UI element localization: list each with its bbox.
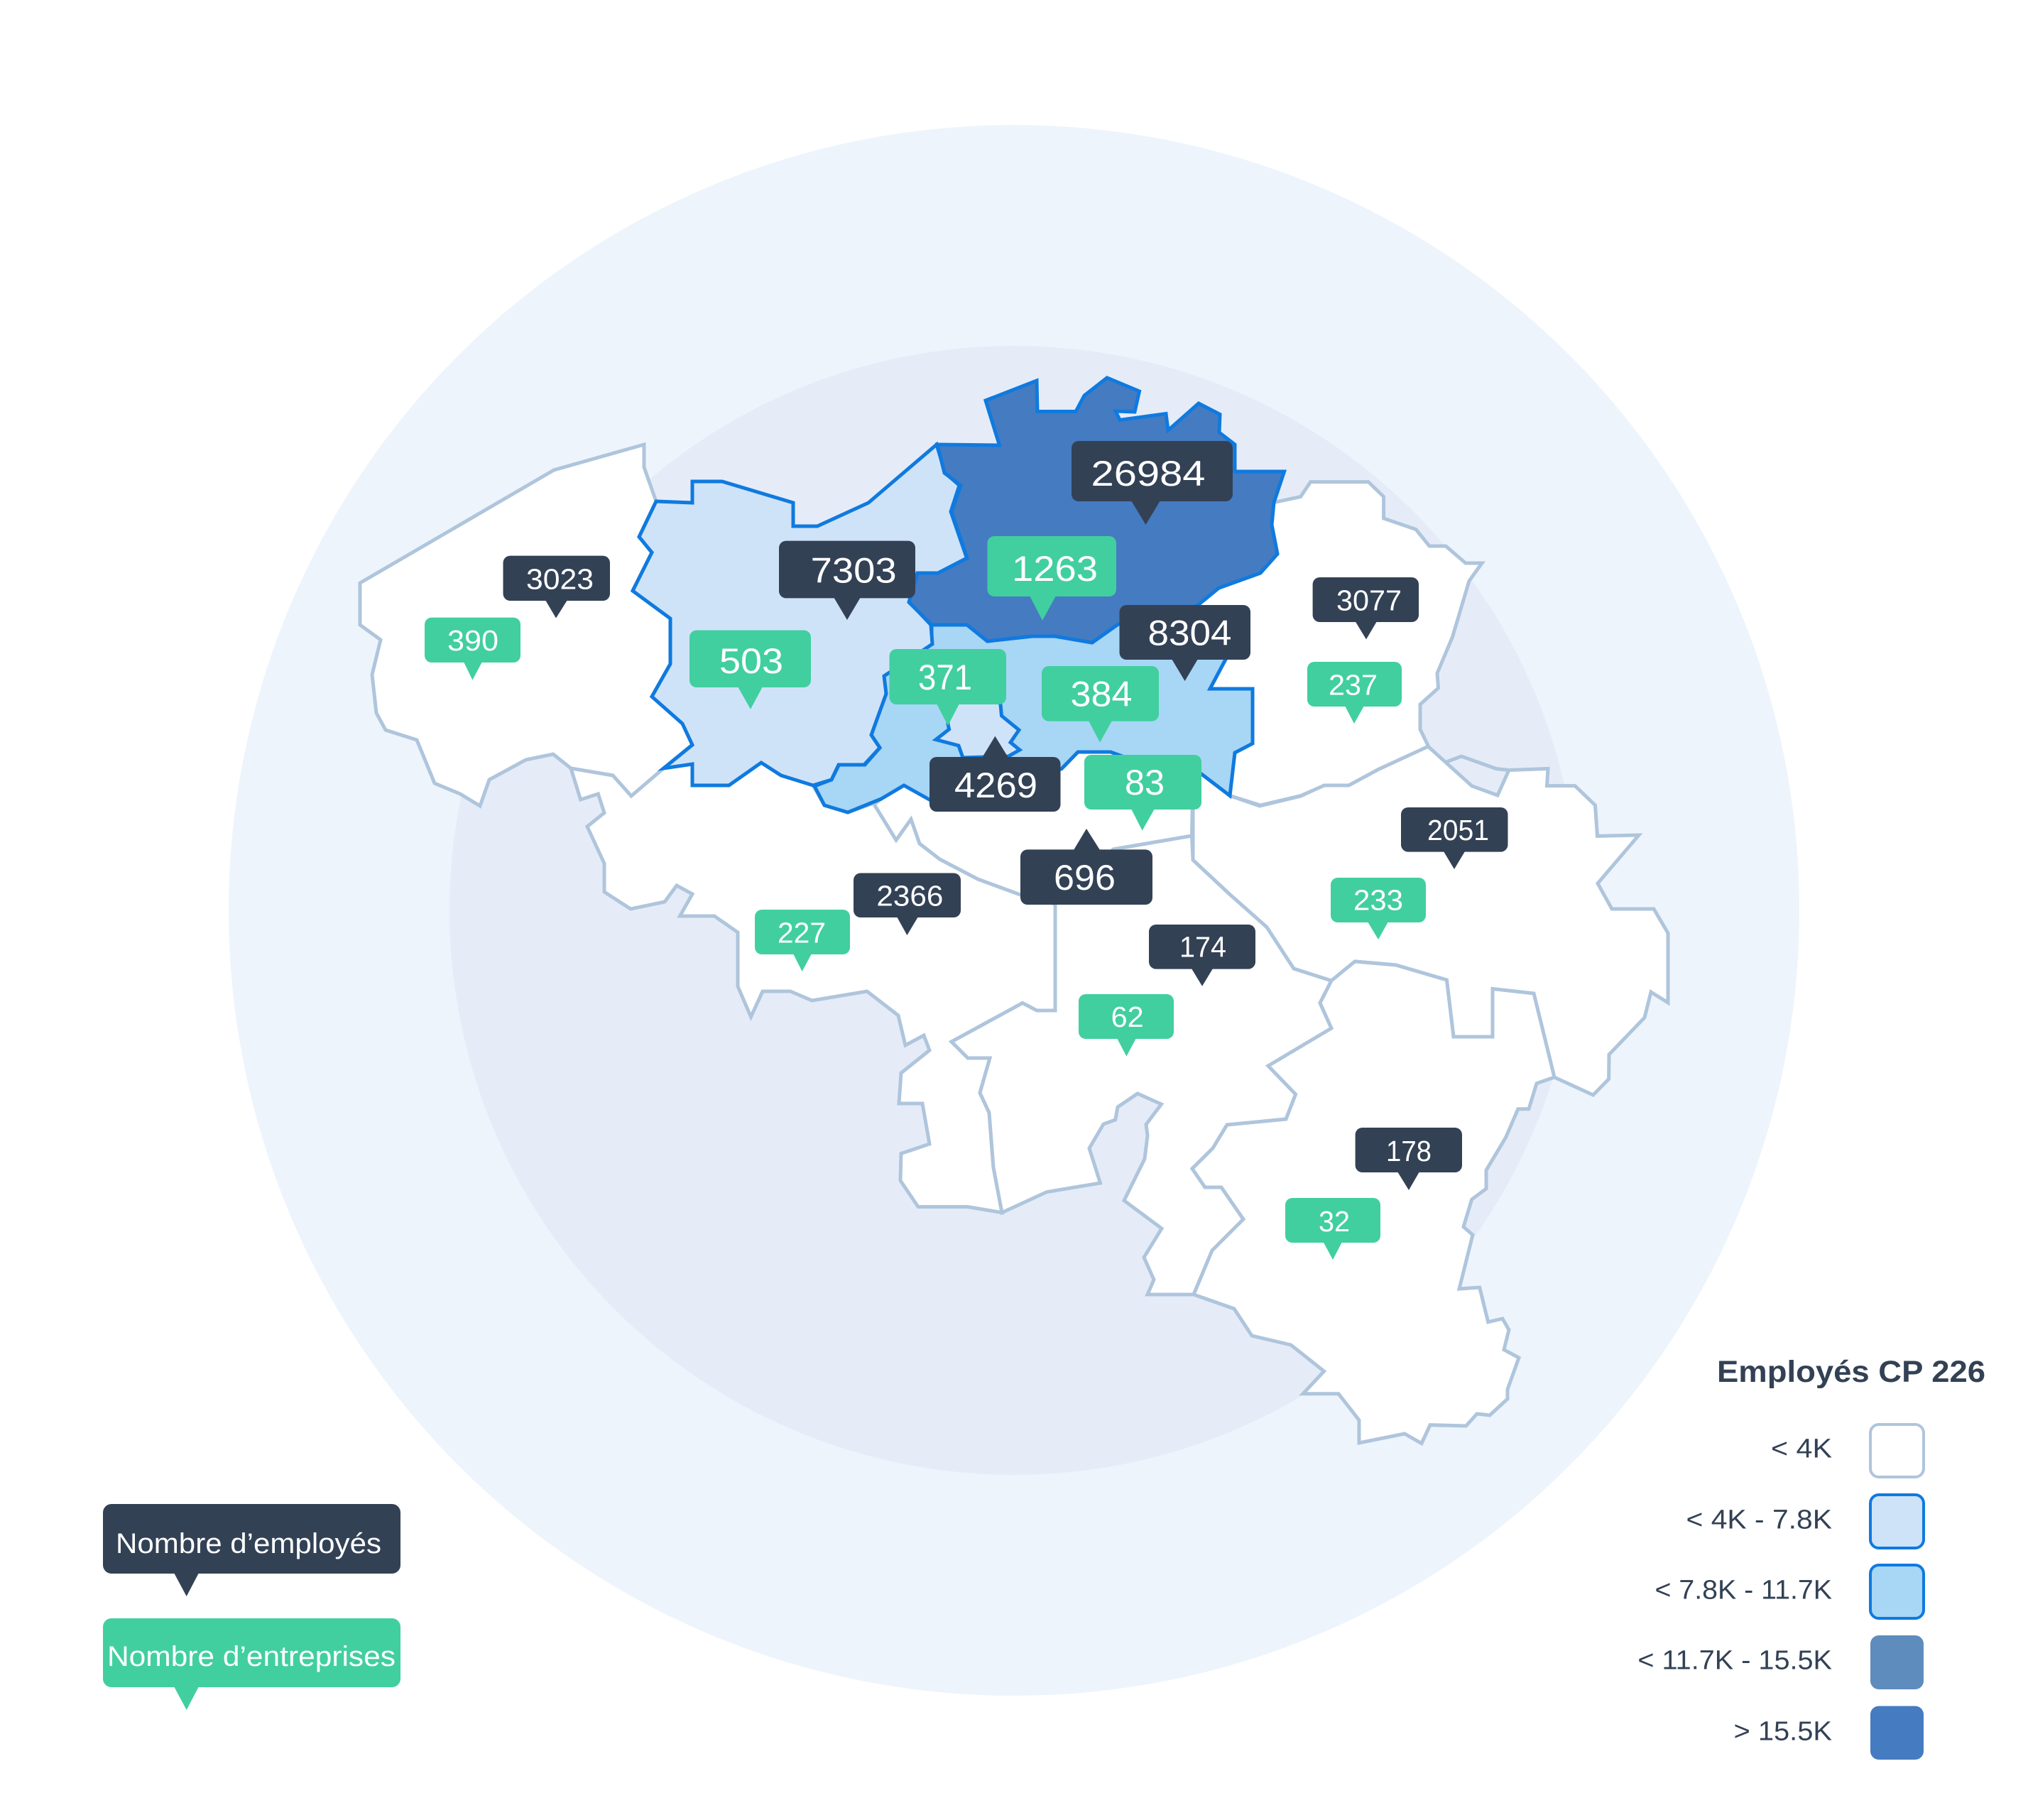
region: Namur (952, 836, 1331, 1295)
legend row: 7.8K to 11.7K: < 7.8K - 11.7K (1654, 1575, 1832, 1605)
tag: employés Anvers (1072, 441, 1233, 525)
region: Anvers (909, 378, 1285, 643)
tag: employés Flandre-Occidentale (503, 556, 610, 618)
map of Belgium (360, 378, 1668, 1444)
tag: entreprises Luxembourg (1285, 1198, 1380, 1260)
legend row: 4K to 7.8K: < 4K - 7.8K (1686, 1505, 1832, 1535)
tag: employés Luxembourg (1356, 1128, 1462, 1190)
legend row: under 4K (1771, 1424, 1924, 1477)
tag: entreprises Bruxelles: 371 (918, 658, 972, 697)
key: nombre d'entreprises: Nombre d’entreprises (107, 1641, 396, 1672)
tag: entreprises Namur: 62 (1111, 1001, 1144, 1033)
tag: employés Luxembourg: 178 (1386, 1135, 1432, 1167)
region: Liège (1193, 746, 1668, 1095)
tag: entreprises Flandre-Occidentale: 390 (447, 624, 498, 657)
legend row: 11.7K to 15.5K: < 11.7K - 15.5K (1637, 1646, 1832, 1676)
key: nombre d'employés: Nombre d’employés (116, 1528, 381, 1559)
tag: entreprises Limbourg: 237 (1329, 669, 1378, 702)
tag: employés Flandre-Occidentale: 3023 (526, 562, 594, 595)
tag: employés Bruxelles (930, 736, 1061, 812)
tag: employés Liège: 2051 (1427, 814, 1489, 846)
tag: entreprises Liège: 233 (1353, 883, 1403, 916)
legend: employés CP 226 (1637, 1355, 1985, 1760)
tag: entreprises Anvers (987, 536, 1116, 621)
region: Brabant flamand (814, 606, 1253, 812)
tag: entreprises Brabant wallon: 83 (1125, 763, 1165, 802)
tag: entreprises Anvers: 1263 (1012, 549, 1098, 589)
tag: entreprises Flandre-Orientale (689, 631, 811, 709)
background circle outer (229, 125, 1799, 1696)
tag: entreprises Luxembourg: 32 (1319, 1205, 1350, 1238)
legend title: Employés CP 226 (1717, 1355, 1985, 1389)
tag: employés Limbourg (1313, 577, 1419, 639)
tag: employés Liège (1401, 807, 1508, 869)
tag: entreprises Liège (1331, 878, 1426, 939)
tag: employés Brabant wallon (1020, 829, 1152, 905)
tag: entreprises Brabant flamand: 384 (1071, 675, 1132, 714)
tag: employés Brabant wallon: 696 (1054, 858, 1116, 898)
region: Bruxelles (936, 699, 1020, 758)
key: nombre d'employés (103, 1504, 400, 1596)
region: Fourons outline (1446, 756, 1509, 770)
legend row: over 15.5K: > 15.5K (1734, 1717, 1832, 1747)
legend row: 7.8K to 11.7K (1654, 1565, 1924, 1618)
legend row: over 15.5K (1734, 1706, 1924, 1760)
tag: employés Hainaut: 2366 (876, 879, 943, 912)
tag: employés Anvers: 26984 (1091, 454, 1206, 494)
tag: entreprises Hainaut (755, 910, 850, 971)
tag: employés Limbourg: 3077 (1336, 584, 1402, 616)
tag: entreprises Brabant wallon (1084, 755, 1201, 831)
region: Brabant wallon (874, 752, 1201, 904)
tag: entreprises Limbourg (1307, 662, 1402, 724)
legend row: under 4K: < 4K (1771, 1434, 1832, 1464)
legend row: 11.7K to 15.5K (1637, 1635, 1924, 1689)
tag: employés Namur (1149, 925, 1255, 986)
tag: employés Brabant flamand: 8304 (1147, 614, 1231, 653)
background circle inner (449, 346, 1579, 1475)
tag: entreprises Namur (1079, 994, 1174, 1057)
tag: employés Bruxelles: 4269 (954, 765, 1037, 805)
region: Limbourg (1197, 482, 1482, 805)
key: nombre d'entreprises (103, 1618, 400, 1710)
tag: employés Brabant flamand (1119, 605, 1250, 681)
tag: entreprises Hainaut: 227 (778, 917, 826, 949)
tag: entreprises Bruxelles (889, 649, 1006, 726)
tag: employés Hainaut (854, 873, 961, 935)
legend row: 4K to 7.8K (1686, 1495, 1924, 1548)
tag: employés Flandre-Orientale (779, 541, 915, 620)
tag: employés Namur: 174 (1179, 931, 1226, 964)
region: Luxembourg (1192, 961, 1554, 1444)
tag: employés Flandre-Orientale: 7303 (811, 551, 897, 591)
region: Flandre-Occidentale (360, 445, 692, 806)
tag: entreprises Brabant flamand (1042, 666, 1159, 743)
tag: entreprises Flandre-Occidentale (425, 618, 520, 680)
region: Flandre-Orientale (633, 445, 967, 785)
region: Hainaut (571, 763, 1055, 1213)
tag: entreprises Flandre-Orientale: 503 (719, 641, 783, 681)
